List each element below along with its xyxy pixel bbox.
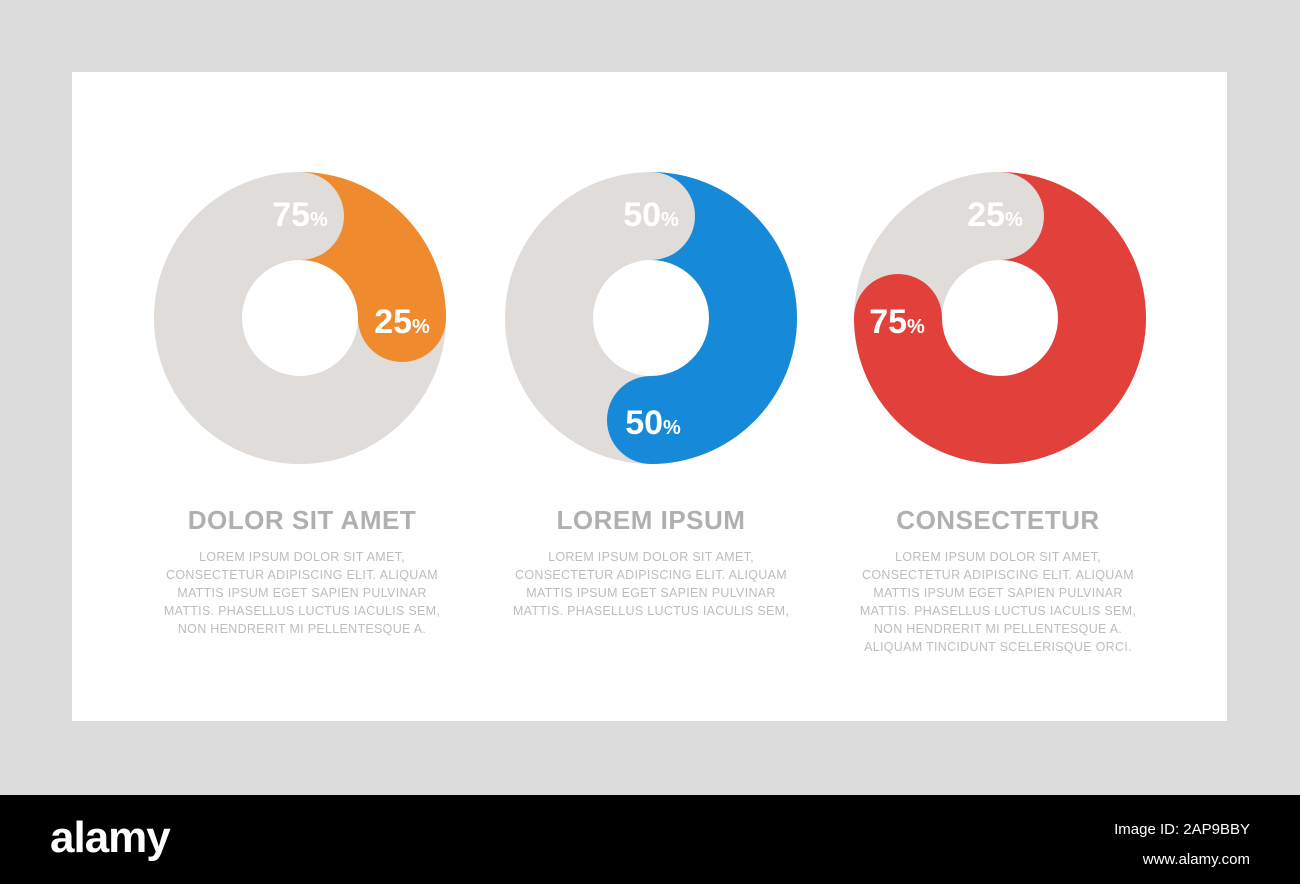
footer info: www.alamy.com: [1143, 851, 1250, 868]
chart: 50% blue: 50%: [623, 196, 679, 234]
chart: 25% orange: 25%: [374, 303, 430, 341]
text block: dolor sit amet: NON HENDRERIT MI PELLENTESQUE A.: [178, 622, 426, 636]
text block: consectetur: MATTIS IPSUM EGET SAPIEN PULVINAR: [873, 586, 1123, 600]
text block: dolor sit amet: DOLOR SIT AMET: [188, 505, 416, 535]
chart: 75% red: 25%: [967, 196, 1023, 234]
text block: consectetur: LOREM IPSUM DOLOR SIT AMET,: [895, 550, 1101, 564]
chart: 75% red: [854, 172, 1102, 420]
text block: consectetur: MATTIS. PHASELLUS LUCTUS IACULIS SEM,: [860, 604, 1136, 618]
text block: dolor sit amet: [164, 505, 440, 636]
text block: dolor sit amet: MATTIS IPSUM EGET SAPIEN PULVINAR: [177, 586, 427, 600]
text block: lorem ipsum: LOREM IPSUM DOLOR SIT AMET,: [548, 550, 754, 564]
footer bar: [0, 795, 1300, 884]
text block: lorem ipsum: LOREM IPSUM: [557, 505, 745, 535]
footer info: [1114, 821, 1250, 868]
text block: consectetur: CONSECTETUR: [896, 505, 1100, 535]
text block: consectetur: CONSECTETUR ADIPISCING ELIT. ALIQUAM: [862, 568, 1134, 582]
text block: lorem ipsum: MATTIS IPSUM EGET SAPIEN PULVINAR: [526, 586, 776, 600]
text block: lorem ipsum: CONSECTETUR ADIPISCING ELIT. ALIQUAM: [515, 568, 787, 582]
text block: dolor sit amet: CONSECTETUR ADIPISCING ELIT. ALIQUAM: [166, 568, 438, 582]
footer info: Image ID: 2AP9BBY: [1114, 821, 1250, 838]
text block: lorem ipsum: [513, 505, 789, 618]
text block: consectetur: [860, 505, 1136, 654]
text block: consectetur: NON HENDRERIT MI PELLENTESQUE A.: [874, 622, 1122, 636]
chart: 25% orange: [198, 172, 446, 420]
chart: 25% orange: 75%: [272, 196, 328, 234]
text block: dolor sit amet: LOREM IPSUM DOLOR SIT AMET,: [199, 550, 405, 564]
footer logo: alamy: [50, 813, 170, 862]
chart: 50% blue: [549, 172, 753, 464]
text block: dolor sit amet: MATTIS. PHASELLUS LUCTUS IACULIS SEM,: [164, 604, 440, 618]
chart: 50% blue: 50%: [625, 404, 681, 442]
text block: lorem ipsum: MATTIS. PHASELLUS LUCTUS IACULIS SEM,: [513, 604, 789, 618]
text block: consectetur: ALIQUAM TINCIDUNT SCELERISQUE ORCI.: [864, 640, 1132, 654]
white panel: [72, 72, 1227, 721]
chart: 75% red: 75%: [869, 303, 925, 341]
